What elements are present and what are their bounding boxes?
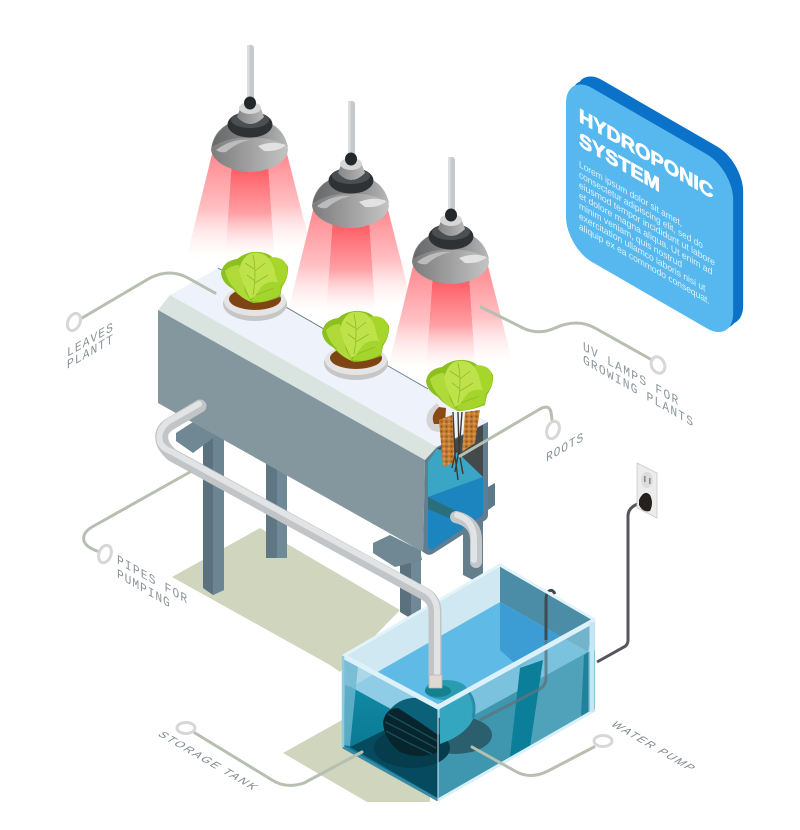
panel: body text: Lorem ipsum dolor sit amet,: [579, 158, 682, 229]
callout: uv lamps: [481, 307, 693, 431]
tank: left face below water: [343, 685, 438, 800]
tray end: water: [428, 477, 483, 550]
panel: body text: exercitation ullamco laboris nisi ut: [579, 210, 706, 294]
panel: front face: [566, 73, 733, 344]
panel: body text: minim veniam, quis nostrud: [579, 199, 682, 270]
callout: pipes for pumping: PIPES FOR: [117, 552, 187, 608]
wall outlet and plug: [637, 463, 657, 518]
callout: roots: [460, 407, 583, 466]
panel: body text: consectetur adipiscing elit, sed do: [579, 168, 703, 251]
callout: pipes for pumping: PUMPING: [117, 566, 170, 612]
power cord: [597, 503, 640, 662]
info panel: [566, 65, 743, 344]
callout: water pump: WATER PUMP: [607, 720, 698, 773]
panel: body text: et dolore magna aliqua. Ut enim ad: [579, 189, 712, 277]
pump: [374, 680, 492, 768]
panel: title: HYDROPONIC: [579, 104, 713, 204]
plant 3 with exposed roots: [426, 360, 493, 480]
floor shadow: lower: [283, 720, 430, 802]
small drain pipe: [456, 515, 476, 562]
pump power cable inside tank: [480, 590, 555, 720]
floor shadow: upper: [172, 528, 400, 672]
lamp beams: [186, 150, 512, 372]
callout: water pump: [472, 720, 698, 776]
panel: title: [579, 104, 713, 228]
callout: uv lamps: UV LAMPS FOR: [583, 339, 678, 409]
callout: uv lamps: GROWING PLANTS: [583, 352, 693, 431]
main pipe: [159, 404, 442, 688]
callout: leaves plant: PLANTT: [67, 331, 113, 373]
panel: body text: [579, 158, 715, 310]
panel: title: SYSTEM: [579, 128, 660, 197]
tank: glass rims: [343, 565, 595, 800]
callout: storage tank: [154, 722, 362, 792]
plant pot 1 with lettuce: [221, 252, 288, 321]
lamps: [211, 45, 489, 284]
tray end: inner wall: [437, 425, 483, 477]
tank: right face below water: [438, 650, 595, 800]
tank: right face above water: [438, 620, 595, 735]
callout: leaves plant: LEAVES: [67, 319, 113, 361]
tank: back right wall: [500, 565, 595, 652]
callout: pipes for pumping: [84, 472, 190, 612]
tank: water surface: [351, 602, 588, 735]
callout: leaves plant: [65, 273, 215, 373]
plant pot 2 with lettuce: [322, 311, 389, 380]
stand legs and crossbars: [176, 422, 483, 618]
tank: left face above water: [343, 656, 438, 735]
storage tank: [343, 565, 595, 800]
grow tray: [158, 268, 495, 555]
callout: storage tank: STORAGE TANK: [154, 730, 260, 792]
panel: body text: eiusmod tempor incididunt ut labore: [579, 179, 715, 268]
tank: back left wall: [343, 565, 500, 687]
panel: body text: aliquip ex ea commodo consequat.: [579, 220, 710, 307]
tray end: water surface: [428, 449, 483, 497]
panel: back side: [571, 65, 743, 340]
callout: roots: ROOTS: [546, 429, 583, 466]
